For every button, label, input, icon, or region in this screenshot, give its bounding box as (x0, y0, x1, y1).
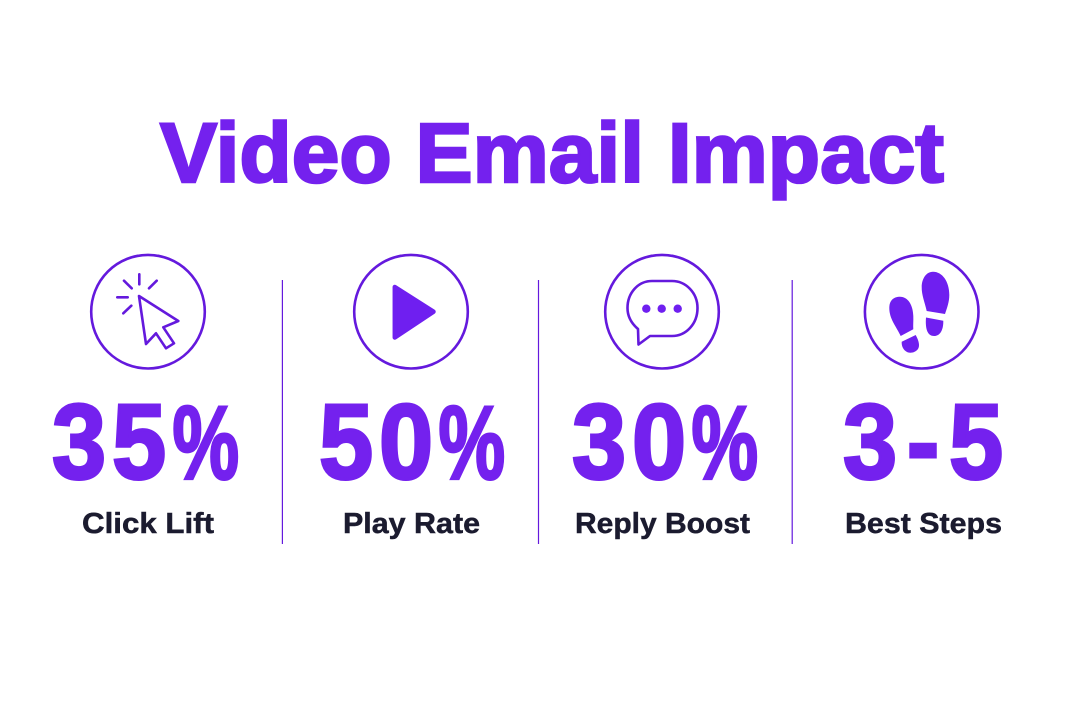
label: Click Lift: Click Lift (82, 508, 214, 540)
label: Play Rate: Play Rate (343, 508, 480, 540)
label: Reply Boost: Reply Boost (575, 508, 750, 540)
icon: chat bubble (605, 255, 719, 368)
stat: 50% (319, 381, 505, 502)
stat: 30%: % (692, 386, 758, 501)
stat: 35%: 35 (52, 381, 172, 502)
panel: play rate (319, 255, 505, 540)
icon: play (354, 255, 468, 368)
title: Video Email Impact (160, 106, 944, 200)
stat: 35% (52, 381, 239, 502)
stat: 30%: 30 (572, 381, 692, 502)
icon: cursor click (91, 255, 205, 368)
stat: 50%: % (438, 386, 505, 501)
divider 1 (282, 280, 283, 544)
panel: reply boost (572, 255, 758, 540)
label: Best Steps: Best Steps (845, 508, 1002, 540)
icon: footprints (865, 255, 978, 368)
stat: 30% (572, 381, 758, 502)
stat: 3-5: 3-5 (843, 381, 1013, 502)
divider 3 (792, 280, 793, 544)
panel: click lift (52, 255, 239, 540)
panel: best steps (843, 255, 1013, 540)
divider 2 (538, 280, 539, 544)
stat: 35%: % (172, 386, 239, 501)
stat: 50%: 50 (319, 381, 439, 502)
